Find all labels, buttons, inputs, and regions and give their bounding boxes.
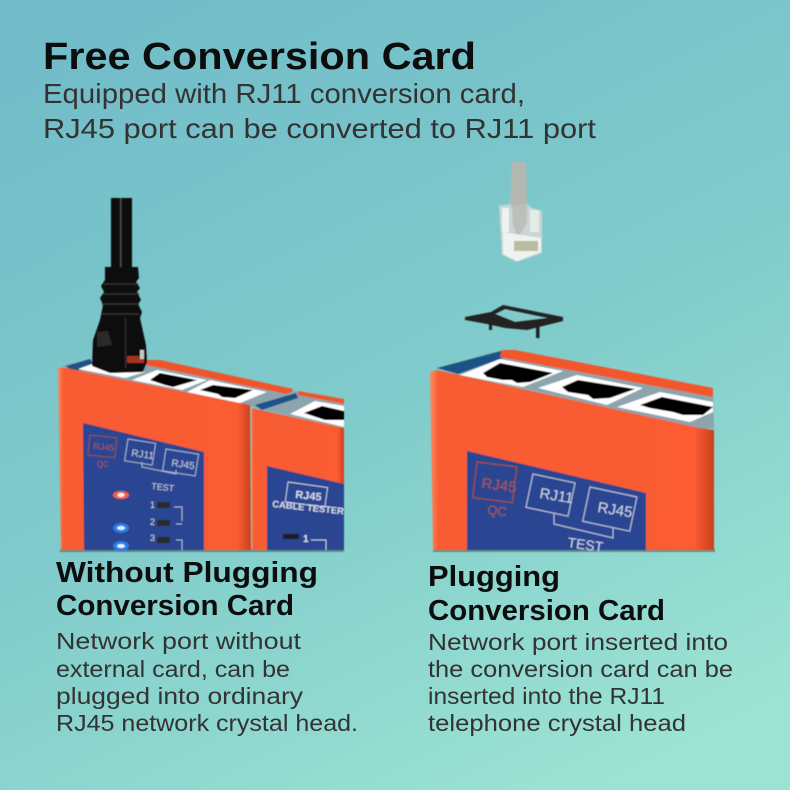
right heading: Plugging — [428, 561, 560, 593]
RJ45 plug and cable — [92, 198, 147, 373]
blue label panel: RJ11 — [131, 448, 155, 462]
left description: Network port without — [56, 628, 302, 654]
subtitle: RJ45 port can be converted to RJ11 port — [43, 113, 596, 144]
device body: main tester — [58, 359, 293, 550]
second tester: 1 — [303, 534, 309, 545]
right description — [428, 629, 733, 736]
right device illustration — [430, 350, 715, 555]
left description: plugged into ordinary — [56, 683, 304, 709]
blue label panel: QC — [97, 460, 109, 469]
blue label panel: RJ45 — [171, 458, 196, 472]
left heading: Without Plugging — [56, 557, 318, 589]
device shadow — [60, 549, 344, 552]
left description: external card, can be — [56, 656, 290, 682]
blue label panel — [83, 423, 204, 551]
conversion card — [465, 305, 563, 338]
left description — [56, 628, 358, 736]
left description: RJ45 network crystal head. — [56, 710, 358, 736]
second tester: CABLE TESTER — [272, 499, 345, 518]
blue label panel: 3 — [150, 533, 155, 543]
second tester: RJ45 — [295, 489, 322, 504]
right heading: Conversion Card — [428, 595, 665, 627]
right description: the conversion card can be — [428, 656, 733, 682]
ports — [132, 370, 207, 390]
ports — [460, 359, 713, 422]
device shadow — [433, 549, 715, 552]
blue label panel: 1 — [150, 500, 155, 510]
subtitle — [43, 78, 596, 144]
right description: Network port inserted into — [428, 629, 728, 655]
title: Free Conversion Card — [43, 36, 476, 78]
blue label panel: TEST — [567, 534, 605, 555]
blue label panel: RJ45 — [93, 441, 115, 453]
RJ11 plug — [499, 162, 542, 262]
left device illustration — [58, 198, 345, 552]
device body — [430, 350, 714, 550]
blue label panel: TEST — [151, 481, 175, 493]
blue label panel: 2 — [150, 517, 155, 527]
right heading — [428, 561, 665, 627]
left heading: Conversion Card — [56, 590, 294, 622]
left heading — [56, 557, 318, 622]
blue label panel: RJ45 — [596, 499, 634, 521]
blue label panel: RJ11 — [538, 485, 575, 507]
right description: inserted into the RJ11 — [428, 683, 665, 709]
right description: telephone crystal head — [428, 710, 686, 736]
blue label panel: QC — [487, 502, 508, 519]
blue label panel — [467, 451, 646, 555]
subtitle: Equipped with RJ11 conversion card, — [43, 78, 525, 109]
blue label panel: RJ45 — [481, 475, 517, 496]
second tester — [251, 391, 345, 550]
